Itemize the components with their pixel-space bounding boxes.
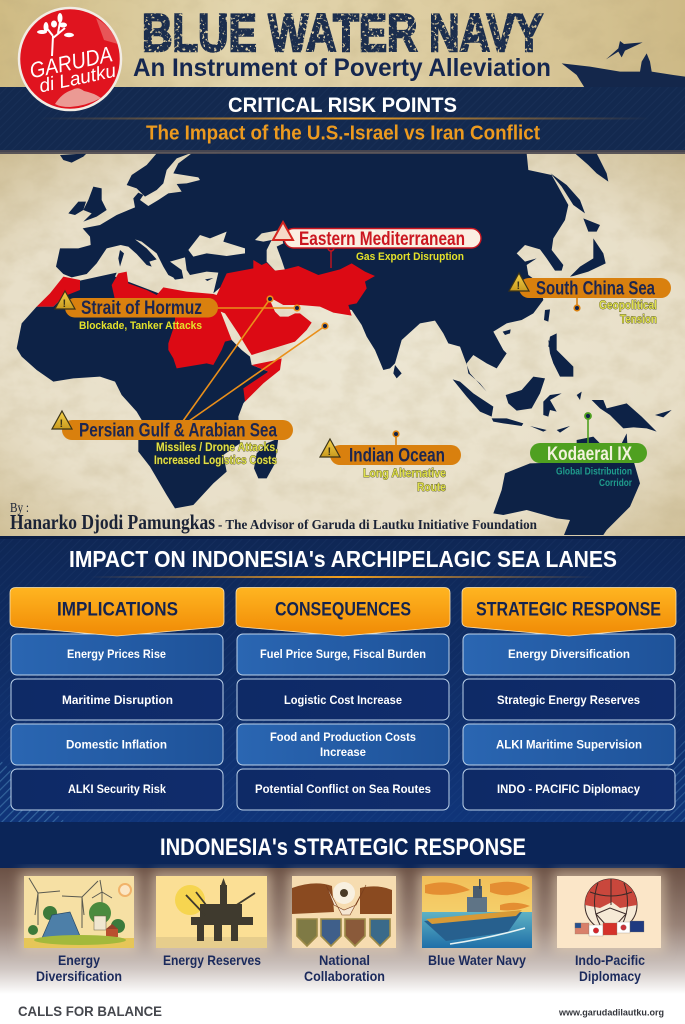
map: East Asia islands xyxy=(503,153,608,350)
map: northern and European islands xyxy=(60,153,232,281)
column: implications: Maritime Disruption xyxy=(62,695,173,707)
label: Indian Ocean: Route xyxy=(417,482,446,494)
illustration: national collaboration xyxy=(292,876,396,948)
label: Indian Ocean: ! xyxy=(328,446,331,458)
illustration: offshore oil rig xyxy=(156,876,267,948)
map: conflict zone Morocco xyxy=(37,277,80,307)
image captions: Diversification xyxy=(36,968,122,984)
label: South China Sea: ! xyxy=(516,280,520,292)
label: Persian Gulf and Arabian Sea: Increased Logistics Costs xyxy=(154,455,277,467)
header band: The Impact of the U.S.-Israel vs Iran Conflict xyxy=(146,122,540,144)
illustration: aircraft carrier at sea xyxy=(422,876,532,948)
map: conflict zone Somalia xyxy=(243,358,282,402)
connector lines xyxy=(183,296,328,421)
label: Indian Ocean: Indian Ocean xyxy=(349,446,445,466)
label: Eastern Mediterranean xyxy=(273,222,481,268)
map: conflict zone Middle East and North Africa xyxy=(112,260,375,368)
logo: Garuda di Lautku xyxy=(19,8,121,110)
logo: Garuda di Lautku: GARUDA xyxy=(27,41,115,83)
section: impact on archipelagic sea lanes xyxy=(0,536,685,826)
column: consequences: Logistic Cost Increase xyxy=(284,695,402,707)
author credit: Hanarko Djodi Pamungkas xyxy=(10,510,215,534)
subtitle: An Instrument of Poverty Alleviation xyxy=(133,54,551,82)
heading: critical risk points: CRITICAL RISK POINTS xyxy=(228,94,457,117)
icon: tree xyxy=(37,13,74,56)
label: South China Sea: South China Sea xyxy=(536,278,655,300)
image captions: Diplomacy xyxy=(579,968,641,984)
image captions: National xyxy=(319,952,370,968)
label: Strait of Hormuz xyxy=(55,291,218,332)
label: Persian Gulf and Arabian Sea: ! xyxy=(60,418,63,430)
footer gradient panel xyxy=(0,868,685,994)
illustration: indo-pacific diplomacy xyxy=(557,876,661,948)
label: Strait of Hormuz: ! xyxy=(62,298,66,310)
column: consequences: Fuel Price Surge, Fiscal Burden xyxy=(260,649,426,661)
label: Persian Gulf and Arabian Sea: Missiles / Drone Attacks, xyxy=(156,442,278,454)
column: implications: Energy Prices Rise xyxy=(67,649,166,661)
world map xyxy=(17,153,672,535)
footer website: www.garudadilautku.org xyxy=(558,1008,664,1018)
parchment background xyxy=(0,0,685,540)
map: Africa xyxy=(17,273,268,508)
label: South China Sea: Geopolitical xyxy=(599,300,657,312)
icon: coral xyxy=(55,88,101,107)
title: BLUE WATER NAVY xyxy=(142,4,543,63)
column: consequences: Food and Production Costs xyxy=(270,732,416,744)
label: Indian Ocean xyxy=(320,431,461,494)
image captions: Collaboration xyxy=(304,968,385,984)
column: strategic response: Energy Diversification xyxy=(508,649,630,661)
column: consequences: Potential Conflict on Sea Routes xyxy=(255,784,431,796)
image glow xyxy=(20,872,665,952)
label: South China Sea xyxy=(509,273,671,326)
illustration: renewable energy xyxy=(24,876,134,948)
footer slogan: CALLS FOR BALANCE xyxy=(18,1004,162,1019)
column: strategic response: ALKI Maritime Supervision xyxy=(496,740,642,752)
label: Indian Ocean: Long Alternative xyxy=(363,468,446,480)
label: Kodaeral IX: Global Distribution xyxy=(556,466,632,478)
logo: Garuda di Lautku: di Lautku xyxy=(37,61,118,97)
column: strategic response: INDO - PACIFIC Diplomacy xyxy=(497,784,641,796)
label: Kodaeral IX: Kodaeral IX xyxy=(547,444,632,465)
heading: impact: IMPACT ON INDONESIA's ARCHIPELAGIC SEA LANES xyxy=(69,546,617,572)
map: Eurasia xyxy=(56,153,568,392)
column: strategic response xyxy=(462,588,676,810)
heading band: strategic response: INDONESIA's STRATEGIC RESPONSE xyxy=(160,834,526,861)
column: strategic response: Strategic Energy Reserves xyxy=(497,695,640,707)
label: Strait of Hormuz: Strait of Hormuz xyxy=(81,298,202,319)
column: consequences: Increase xyxy=(320,747,366,759)
label: Strait of Hormuz: Blockade, Tanker Attacks xyxy=(79,320,202,332)
label: Kodaeral IX: Corridor xyxy=(599,477,632,489)
icon: aircraft carrier and jet xyxy=(562,41,685,88)
column: implications: ALKI Security Risk xyxy=(68,784,167,796)
map: South East Asia and Australia xyxy=(393,340,672,535)
label: South China Sea: Tension xyxy=(620,314,657,326)
author credit xyxy=(10,501,537,534)
image captions: Energy xyxy=(58,952,100,968)
author credit: By : xyxy=(10,501,29,516)
image captions: Energy Reserves xyxy=(163,952,261,968)
heading band: strategic response xyxy=(0,822,685,868)
image captions: Indo-Pacific xyxy=(575,952,645,968)
label: Persian Gulf and Arabian Sea: Persian Gulf & Arabian Sea xyxy=(79,420,277,442)
column: consequences: CONSEQUENCES xyxy=(275,600,411,620)
label: Kodaeral IX xyxy=(530,413,647,489)
column: consequences xyxy=(236,588,450,810)
image captions: Blue Water Navy xyxy=(428,952,526,968)
image captions xyxy=(36,952,645,984)
column: implications: Domestic Inflation xyxy=(66,740,167,752)
label: Eastern Mediterranean: Gas Export Disruption xyxy=(356,251,464,263)
label: Eastern Mediterranean: Eastern Mediterranean xyxy=(299,229,465,250)
map: Scandinavia xyxy=(127,153,190,197)
label: Persian Gulf and Arabian Sea xyxy=(52,411,293,467)
column: implications xyxy=(10,588,224,810)
header band xyxy=(0,87,685,154)
column: implications: IMPLICATIONS xyxy=(57,600,178,620)
author credit: - The Advisor of Garuda di Lautku Initiative Foundation xyxy=(218,517,537,532)
map: Madagascar xyxy=(254,438,278,478)
